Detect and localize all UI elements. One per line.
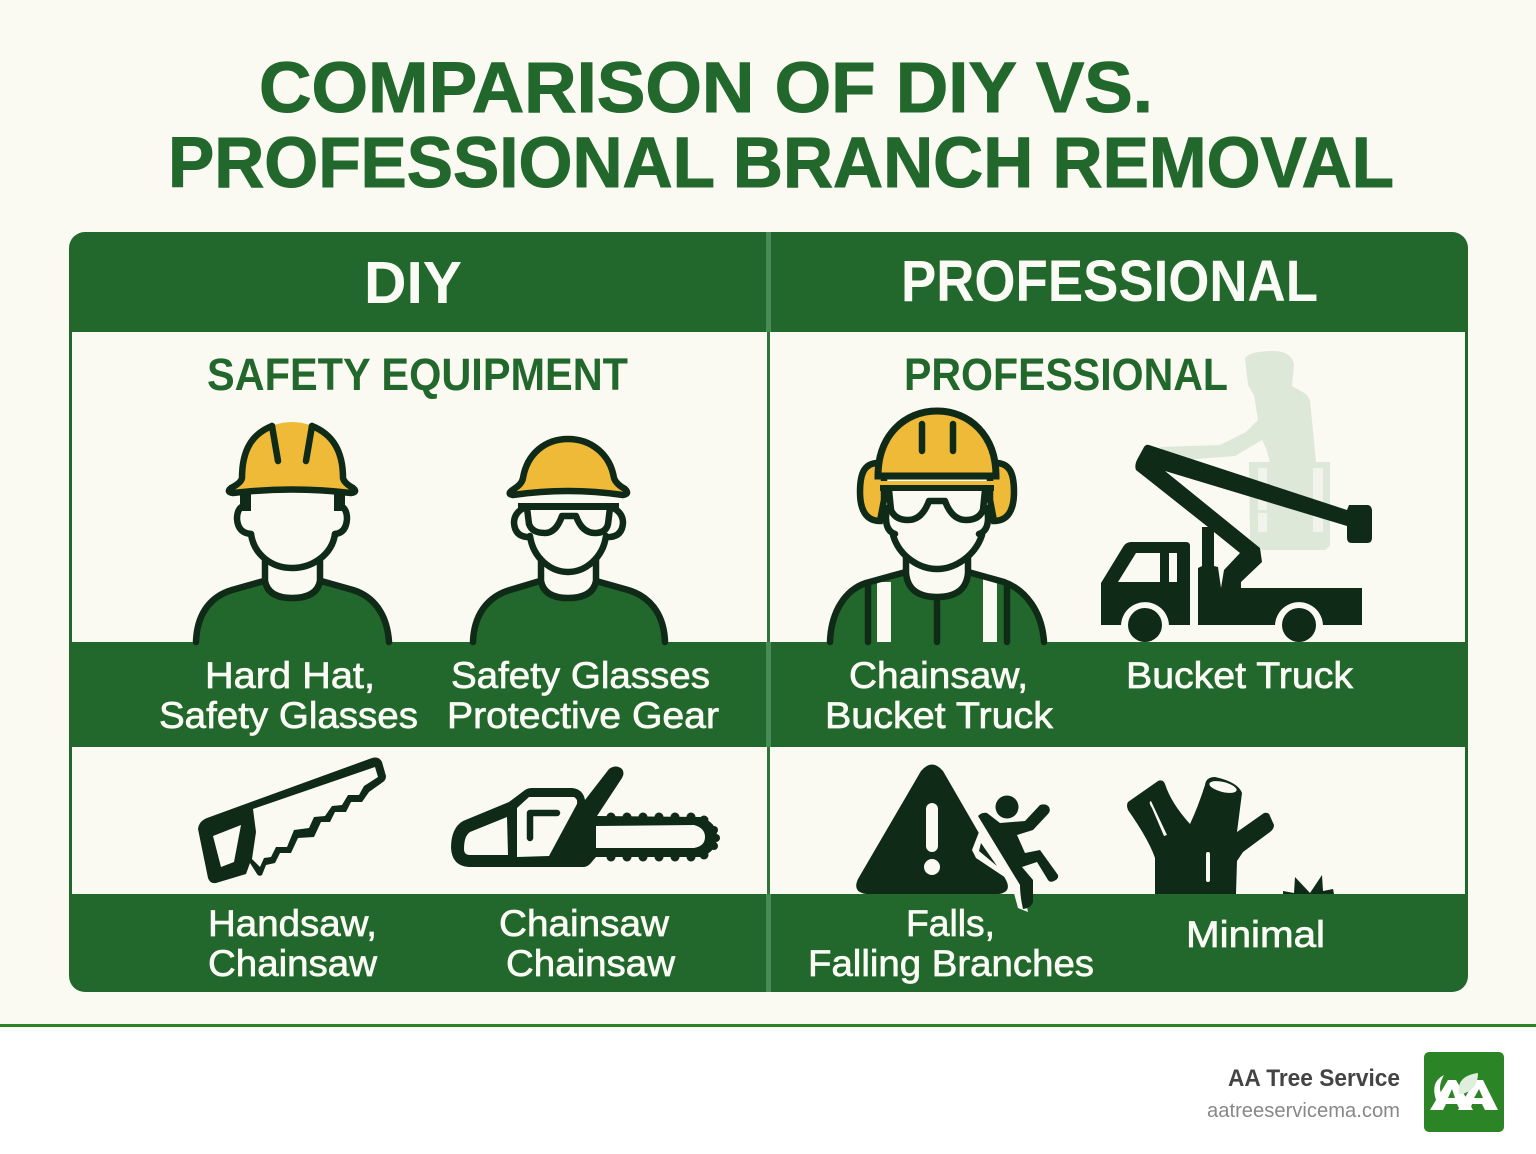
title: PROFESSIONAL BRANCH REMOVAL bbox=[168, 124, 1394, 203]
label: chainsaw, chainsaw bbox=[499, 903, 675, 984]
ghost figure behind truck bbox=[1160, 351, 1330, 550]
panel: comparison table bbox=[69, 232, 1468, 992]
subheading: safety equipment: SAFETY EQUIPMENT bbox=[207, 349, 628, 400]
label: safety glasses, protective gear: Safety Glasses bbox=[451, 655, 710, 696]
title bbox=[168, 49, 1394, 203]
icon: professional worker with ear protection and vest bbox=[830, 411, 1044, 642]
label: chainsaw, chainsaw: Chainsaw bbox=[506, 943, 675, 984]
heading: DIY column: DIY bbox=[364, 250, 462, 316]
label: safety glasses, protective gear bbox=[447, 655, 719, 736]
website: aatreeservicema.com bbox=[1207, 1100, 1400, 1122]
icon: chainsaw bbox=[451, 766, 720, 867]
label: falls, falling branches bbox=[808, 903, 1094, 984]
icon: handsaw bbox=[198, 758, 386, 883]
label: hard hat, safety glasses: Safety Glasses bbox=[159, 695, 418, 736]
icon: bucket truck bbox=[1101, 445, 1372, 642]
label: handsaw, chainsaw bbox=[208, 903, 377, 984]
label: falls, falling branches: Falls, bbox=[906, 903, 995, 944]
subheading: professional: PROFESSIONAL bbox=[904, 349, 1228, 400]
label: chainsaw, bucket truck bbox=[825, 655, 1054, 736]
label: minimal: Minimal bbox=[1186, 914, 1325, 955]
label: chainsaw, chainsaw: Chainsaw bbox=[499, 903, 669, 944]
label: handsaw, chainsaw: Chainsaw bbox=[208, 943, 377, 984]
brand name: AA Tree Service bbox=[1228, 1065, 1400, 1092]
icon: worker with hard hat and safety glasses bbox=[473, 439, 665, 642]
label: hard hat, safety glasses bbox=[159, 655, 418, 736]
label: handsaw, chainsaw: Handsaw, bbox=[208, 903, 377, 944]
label: hard hat, safety glasses: Hard Hat, bbox=[205, 655, 375, 696]
label: chainsaw, bucket truck: Bucket Truck bbox=[825, 695, 1054, 736]
label: safety glasses, protective gear: Protective Gear bbox=[447, 695, 719, 736]
title: COMPARISON OF DIY VS. bbox=[259, 49, 1153, 128]
label: chainsaw, bucket truck: Chainsaw, bbox=[849, 655, 1028, 696]
icon: worker with hard hat bbox=[196, 422, 389, 642]
heading: Professional column: PROFESSIONAL bbox=[901, 249, 1318, 314]
label: bucket truck: Bucket Truck bbox=[1126, 655, 1354, 696]
icon: warning triangle and falling person bbox=[856, 764, 1058, 912]
icon: small grass tuft bbox=[1283, 875, 1334, 894]
icon: tree stump bbox=[1127, 777, 1274, 894]
logo bbox=[1424, 1052, 1504, 1132]
label: falls, falling branches: Falling Branches bbox=[808, 943, 1094, 984]
footer bbox=[0, 1024, 1536, 1154]
